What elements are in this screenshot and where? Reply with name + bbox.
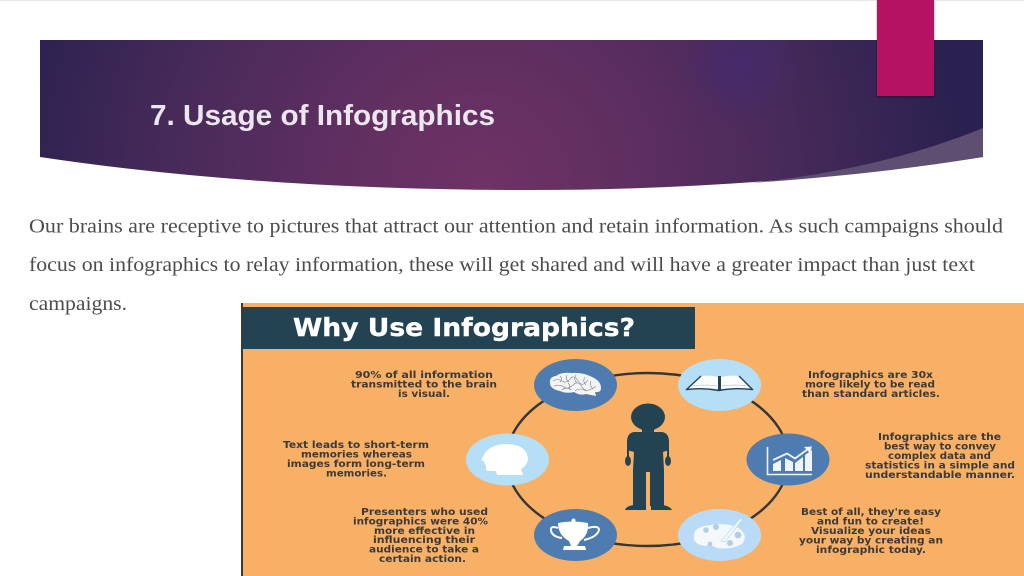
body paragraph: campaigns. — [29, 294, 127, 315]
accent tab — [877, 0, 934, 96]
heading bar: Why Use Infographics? — [293, 313, 635, 342]
callout: best way to convey: understandable manner. — [865, 470, 1015, 481]
callout: long-term memories: images form long-term — [287, 459, 425, 470]
callout: presenters 40 percent — [353, 507, 488, 565]
callout: best way to convey: statistics in a simple and — [865, 460, 1015, 472]
callout: easy and fun: your way by creating an — [799, 536, 943, 546]
callout: 30x more likely: than standard articles. — [802, 389, 940, 400]
callout: 90 percent visual — [351, 370, 497, 400]
callout: 30x more likely: Infographics are 30x — [808, 370, 934, 381]
callout: presenters 40 percent: more effective in — [374, 526, 475, 537]
callout: best way to convey — [865, 432, 1015, 481]
callout: best way to convey: best way to convey — [884, 442, 997, 452]
callout: best way to convey: Infographics are the — [878, 432, 1001, 443]
icon: open book — [678, 359, 761, 411]
callout: easy and fun: Visualize your ideas — [811, 526, 931, 537]
callout: long-term memories: memories whereas — [301, 450, 412, 460]
person figure — [625, 404, 672, 510]
callout: 30x more likely — [802, 370, 940, 400]
callout: easy and fun: infographic today. — [816, 545, 926, 556]
panel: title banner — [40, 40, 983, 190]
callout: best way to convey: complex data and — [888, 451, 991, 462]
icon: head profile — [466, 434, 549, 486]
callout: 30x more likely: more likely to be read — [805, 380, 935, 390]
callout: long-term memories — [283, 440, 429, 480]
icon: palette — [678, 509, 761, 561]
panel: why use infographics image — [241, 303, 1024, 576]
callout: 90 percent visual: is visual. — [398, 389, 450, 400]
callout: long-term memories: Text leads to short-term — [283, 440, 429, 451]
callout: easy and fun: and fun to create! — [817, 516, 924, 528]
ring connector — [506, 373, 788, 546]
callout: 90 percent visual: 90% of all information — [355, 370, 493, 381]
body paragraph: focus on infographics to relay information, these will get shared and will have a greater impact than just text — [29, 255, 976, 276]
callout: easy and fun: Best of all, they're easy — [801, 507, 942, 518]
icon: growth chart — [746, 434, 830, 486]
callout: presenters 40 percent: audience to take a — [369, 544, 479, 556]
icon: brain — [534, 359, 617, 411]
callout: easy and fun — [799, 507, 943, 556]
callout: presenters 40 percent: influencing their — [373, 535, 475, 546]
callout: presenters 40 percent: Presenters who used — [361, 507, 488, 518]
title: 7. Usage of Infographics — [150, 100, 495, 132]
callout: presenters 40 percent: infographics were 40% — [353, 516, 488, 528]
body paragraph — [29, 216, 1003, 315]
icon: trophy — [534, 509, 617, 561]
callout: long-term memories: memories. — [326, 468, 387, 480]
callout: 90 percent visual: transmitted to the brain — [351, 380, 497, 390]
banner light wedge — [750, 128, 983, 183]
body paragraph: Our brains are receptive to pictures that attract our attention and retain information. As such campaigns should — [29, 216, 1003, 238]
heading bar — [243, 307, 695, 349]
callout: presenters 40 percent: certain action. — [379, 554, 466, 565]
